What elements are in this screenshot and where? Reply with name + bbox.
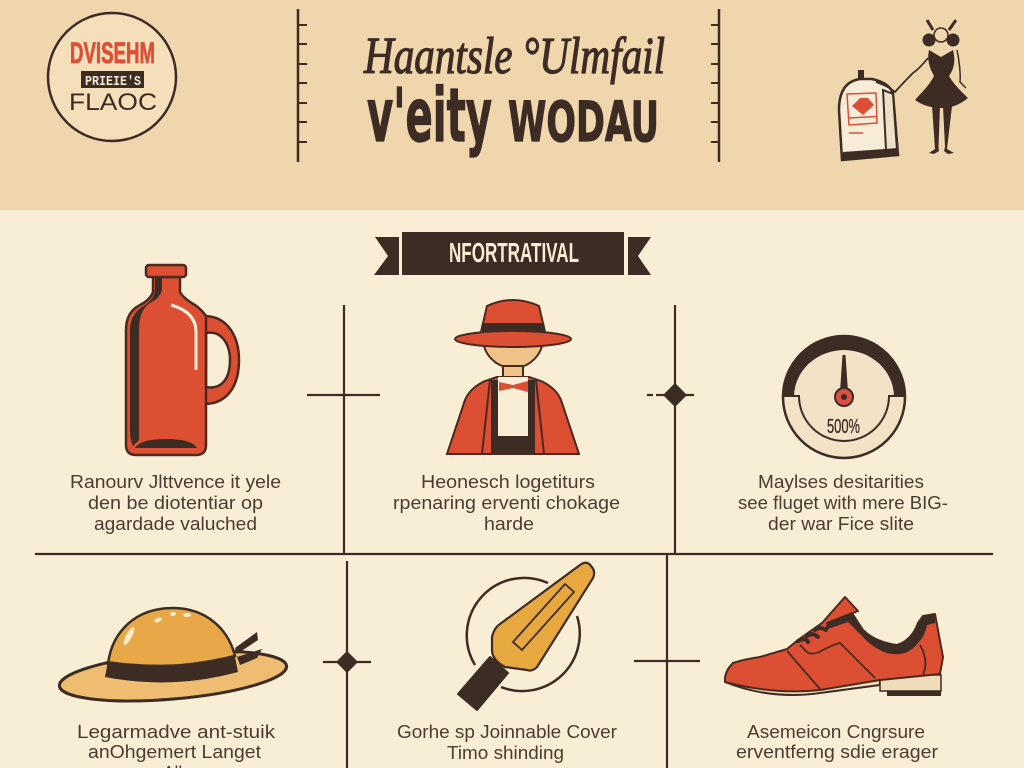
panel: gauge xyxy=(738,335,948,534)
title script line: Haantsle °Ulmfail xyxy=(363,28,665,85)
title bold line: v'eity xyxy=(367,73,492,159)
text: shoe caption xyxy=(736,721,938,762)
panel: trowel xyxy=(397,563,617,763)
icon: man in hat xyxy=(447,300,579,454)
text: bottle caption xyxy=(70,471,281,534)
text: straw hat caption: Legarmadve ant-stuik xyxy=(77,721,276,742)
left header ruler xyxy=(298,9,307,162)
text: gauge caption xyxy=(738,471,948,534)
icon: bottle xyxy=(126,265,239,455)
diamond connector upper xyxy=(663,383,687,407)
text: gauge caption: see fluget with mere BIG- xyxy=(738,492,948,513)
panel: bottle xyxy=(70,265,281,534)
ribbon banner xyxy=(374,232,651,275)
text: shoe caption: Asemeicon Cngrsure xyxy=(747,721,925,742)
illustration: machine and woman xyxy=(839,20,968,160)
text: gauge caption: Maylses desitarities xyxy=(758,471,924,492)
header band xyxy=(0,0,1024,210)
icon: gauge xyxy=(782,335,906,458)
text: man caption xyxy=(393,471,620,534)
text: gauge caption: der war Fice slite xyxy=(768,513,914,534)
icon: shoe xyxy=(725,597,943,696)
logo badge: DVISEHM xyxy=(70,37,155,70)
text: shoe caption: erventferng sdie erager xyxy=(736,741,938,762)
diamond connector lower xyxy=(336,651,358,673)
grid dividers xyxy=(35,305,993,768)
logo badge: PRIEIE'S xyxy=(85,74,141,90)
logo badge xyxy=(48,13,176,141)
text: bottle caption: Ranourv Jlttvence it yele xyxy=(70,471,281,492)
icon: straw hat xyxy=(57,608,289,709)
text: bottle caption: agardade valuched xyxy=(94,513,257,534)
title bold line: WODAU xyxy=(508,90,659,154)
text: straw hat caption xyxy=(77,721,276,768)
text: man caption: harde xyxy=(484,513,534,534)
panel: man in hat xyxy=(393,300,620,534)
text: bottle caption: den be diotentiar op xyxy=(88,492,263,513)
text: man caption: Heonesch logetiturs xyxy=(421,471,595,492)
ribbon banner: NFORTRATIVAL xyxy=(449,237,579,268)
text: trowel caption: Gorhe sp Joinnable Cover xyxy=(397,721,617,742)
text: trowel caption xyxy=(397,721,617,763)
panel: shoe xyxy=(725,597,943,762)
icon: trowel xyxy=(458,563,594,710)
icon: gauge: 500% xyxy=(827,416,860,438)
panel: straw hat xyxy=(57,608,289,768)
right header ruler xyxy=(711,9,719,162)
text: trowel caption: Timo shinding xyxy=(447,742,564,763)
logo badge: FLAOC xyxy=(69,89,157,116)
text: man caption: rpenaring erventi chokage xyxy=(393,492,620,513)
text: straw hat caption: anOhgemert Langet xyxy=(88,741,261,762)
